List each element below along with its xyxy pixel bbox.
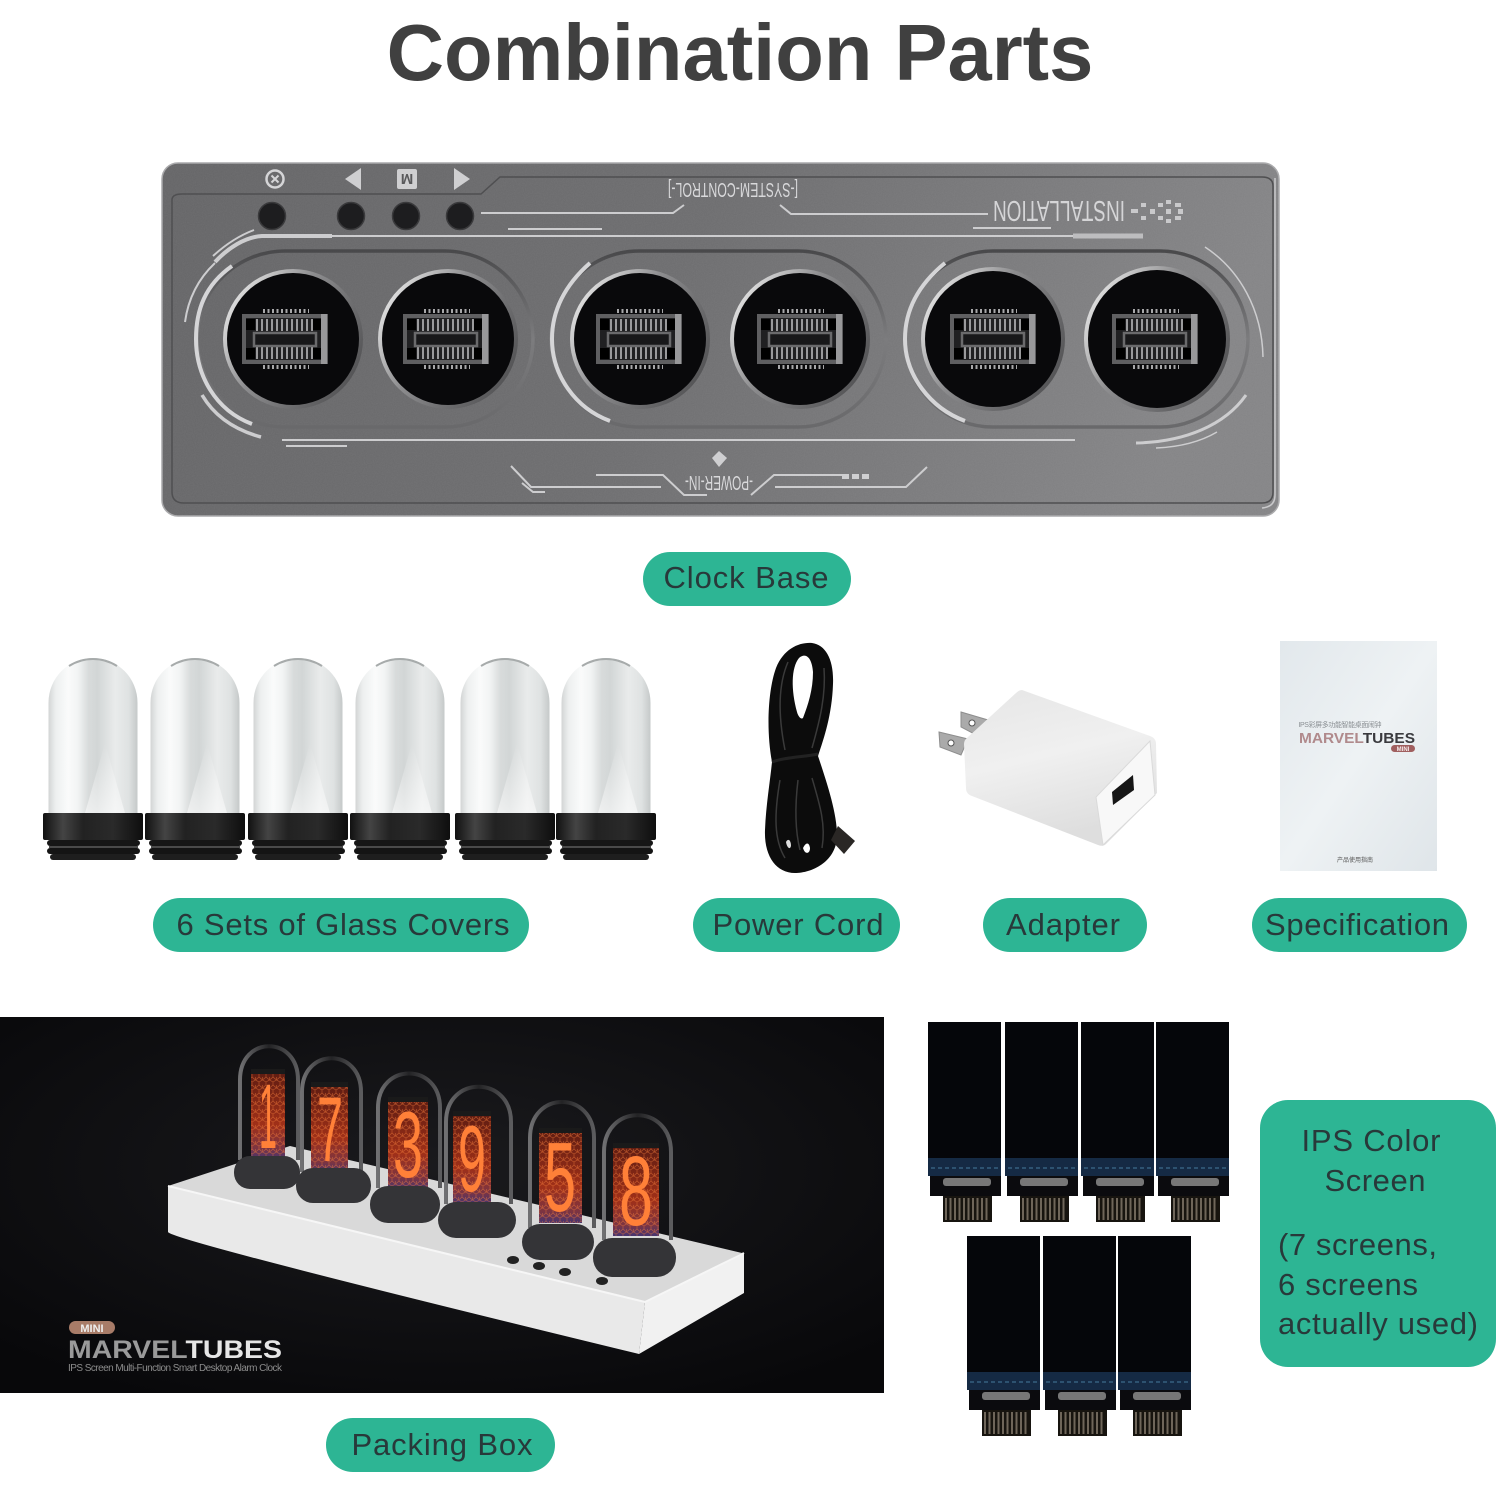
nixie tube 4: 9 bbox=[458, 1106, 486, 1211]
socket holes bbox=[223, 266, 1230, 412]
nixie tube 5 bbox=[522, 1102, 594, 1260]
nixie tube 5: 5 bbox=[544, 1122, 576, 1232]
label pill: specification: Specification bbox=[1265, 907, 1449, 942]
icon: specification booklet: 产品使用指南 bbox=[1337, 856, 1373, 864]
panel: IPS screens bbox=[928, 1022, 1229, 1436]
label pill: packing box: Packing Box bbox=[352, 1427, 533, 1462]
label pill: specification bbox=[1252, 898, 1467, 952]
label: installation: INSTALLATION bbox=[993, 194, 1125, 226]
cord bundle bbox=[765, 643, 837, 873]
pixel logo bbox=[1131, 200, 1183, 223]
body bbox=[964, 690, 1157, 846]
nixie tube 2: 7 bbox=[317, 1079, 343, 1181]
panel: glass covers bbox=[43, 658, 656, 860]
nixie tube 3 bbox=[370, 1074, 440, 1223]
icon: specification booklet: IPS彩屏多功能智能桌面闹钟 bbox=[1298, 720, 1382, 729]
label pill: power cord: Power Cord bbox=[712, 907, 884, 942]
callout: IPS color screen: (7 screens, bbox=[1278, 1227, 1437, 1262]
control buttons bbox=[258, 202, 474, 230]
icon: adapter bbox=[939, 690, 1157, 846]
callout: IPS color screen bbox=[1260, 1100, 1496, 1367]
brand tagline: IPS Screen Multi-Function Smart Desktop Alarm Clock bbox=[68, 1363, 283, 1374]
button icons bbox=[266, 168, 470, 190]
nixie tube 1: 1 bbox=[259, 1066, 277, 1168]
usb port bbox=[1112, 775, 1134, 805]
title: Combination Parts bbox=[387, 8, 1093, 97]
cord gaps bbox=[803, 844, 810, 853]
nixie tube 3: 3 bbox=[393, 1092, 423, 1197]
callout: IPS color screen: Screen bbox=[1324, 1163, 1426, 1198]
nixie tube 4 bbox=[438, 1087, 516, 1238]
power-in marker dots bbox=[712, 451, 869, 479]
nixie tube 6: 8 bbox=[619, 1136, 653, 1246]
icon: specification booklet: MINI bbox=[1397, 747, 1410, 753]
label: power in: -POWER-IN- bbox=[685, 471, 753, 493]
icon: specification booklet bbox=[1280, 641, 1437, 871]
base plate bbox=[162, 163, 1279, 516]
panel: packing box bbox=[0, 1017, 884, 1393]
recessed pills bbox=[197, 251, 1248, 427]
brand mini badge bbox=[69, 1321, 115, 1335]
icon: specification booklet: MARVELTUBES bbox=[1299, 730, 1415, 747]
label pill: clock base bbox=[643, 552, 851, 606]
label pill: power cord bbox=[693, 898, 900, 952]
label pill: adapter: Adapter bbox=[1006, 907, 1120, 942]
label pill: packing box bbox=[326, 1418, 555, 1472]
circuit line decorations bbox=[185, 205, 1263, 495]
brand mini badge: MINI bbox=[80, 1323, 104, 1335]
prongs bbox=[939, 712, 988, 755]
nixie tube 6 bbox=[593, 1115, 676, 1277]
label pill: adapter bbox=[983, 898, 1147, 952]
label pill: clock base: Clock Base bbox=[664, 560, 828, 595]
clock buttons bbox=[507, 1256, 608, 1285]
front face bbox=[1096, 741, 1155, 845]
callout: IPS color screen: 6 screens bbox=[1278, 1267, 1418, 1302]
panel: clock base bbox=[162, 163, 1279, 516]
cord highlights bbox=[772, 662, 824, 858]
label pill: glass covers: 6 Sets of Glass Covers bbox=[176, 907, 510, 942]
white clock base bbox=[168, 1146, 744, 1354]
icon: power cord bbox=[765, 643, 855, 873]
cord loop gap bbox=[793, 656, 813, 719]
callout: IPS color screen: actually used) bbox=[1278, 1306, 1478, 1341]
label: system control: [-SYSTEM-CONTROL-] bbox=[668, 178, 798, 200]
label pill: glass covers bbox=[153, 898, 529, 952]
nixie tube 2 bbox=[296, 1058, 371, 1203]
callout: IPS color screen: IPS Color bbox=[1302, 1123, 1440, 1158]
button icons: M bbox=[401, 170, 413, 187]
nixie tube 1 bbox=[234, 1046, 300, 1189]
usb plug bbox=[831, 826, 855, 854]
brand logo: MARVEL TUBES bbox=[68, 1336, 282, 1364]
